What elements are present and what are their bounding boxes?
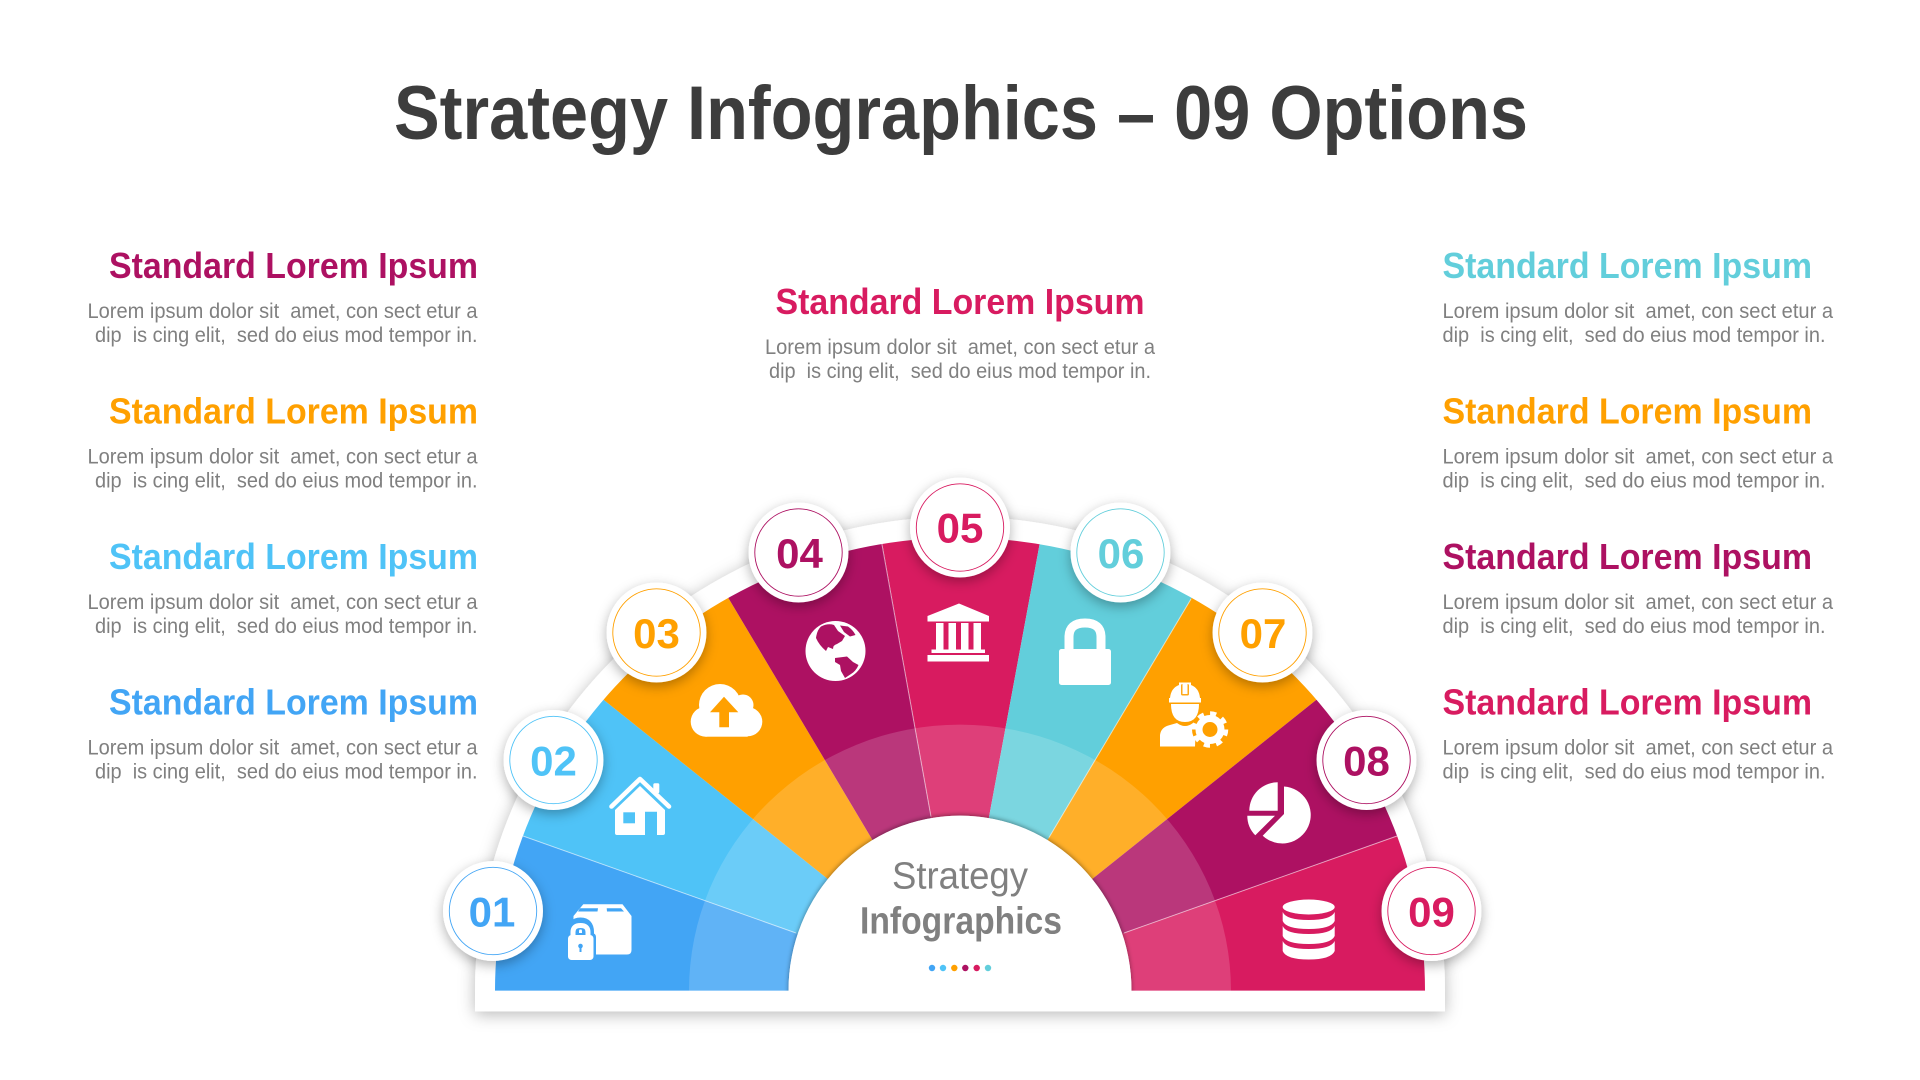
semicircle base plate bbox=[475, 517, 1445, 1012]
centre hub bbox=[788, 816, 1132, 1000]
option 04 text: dip is cing elit, sed do eius mod tempor in. bbox=[95, 324, 478, 347]
icon: database bbox=[1283, 900, 1335, 960]
badge 04 bbox=[748, 502, 848, 602]
option 06 text: Lorem ipsum dolor sit amet, con sect etur a bbox=[1442, 300, 1833, 323]
segment 07 bbox=[1048, 598, 1316, 879]
option 01 text bbox=[88, 682, 478, 784]
option 08 text bbox=[1442, 536, 1833, 638]
option 04 text: Lorem ipsum dolor sit amet, con sect etur a bbox=[88, 300, 478, 323]
badge 05: 05 bbox=[937, 505, 983, 552]
badge 09 bbox=[1382, 861, 1482, 961]
option 01 text: dip is cing elit, sed do eius mod tempor in. bbox=[95, 760, 478, 784]
badge 01: 01 bbox=[469, 888, 515, 936]
option 08 text: dip is cing elit, sed do eius mod tempor in. bbox=[1442, 615, 1826, 638]
hub colour dots bbox=[929, 965, 991, 971]
badge 02 bbox=[504, 710, 604, 810]
option 06 text: Standard Lorem Ipsum bbox=[1442, 245, 1812, 286]
icon: cloud upload bbox=[691, 684, 762, 737]
option 06 text: dip is cing elit, sed do eius mod tempor in. bbox=[1442, 324, 1826, 347]
segment 06 bbox=[988, 544, 1192, 840]
option 03 text: Standard Lorem Ipsum bbox=[109, 390, 478, 432]
option 04 text bbox=[88, 245, 478, 347]
option 07 text: dip is cing elit, sed do eius mod tempor in. bbox=[1442, 470, 1826, 492]
segment 02 bbox=[523, 700, 828, 934]
option 02 text: Lorem ipsum dolor sit amet, con sect etur a bbox=[88, 591, 478, 614]
option 05 text: Standard Lorem Ipsum bbox=[776, 281, 1144, 322]
left text column bbox=[88, 245, 478, 784]
icon: box with padlock bbox=[565, 904, 632, 962]
option 09 text: Standard Lorem Ipsum bbox=[1442, 682, 1812, 722]
hub label: Strategy bbox=[892, 856, 1028, 898]
option 07 text: Standard Lorem Ipsum bbox=[1442, 390, 1812, 432]
option 04 text: Standard Lorem Ipsum bbox=[109, 245, 478, 286]
option 09 text bbox=[1442, 682, 1833, 784]
badge 01 bbox=[443, 861, 543, 961]
fan of nine segments bbox=[495, 540, 1425, 991]
icon: padlock bbox=[1059, 623, 1111, 685]
right text column bbox=[1442, 245, 1833, 784]
badge 07: 07 bbox=[1240, 610, 1286, 657]
option 03 text: Lorem ipsum dolor sit amet, con sect etur a bbox=[88, 446, 478, 468]
badge 07 bbox=[1212, 582, 1312, 682]
icon: globe bbox=[806, 621, 866, 681]
option 07 text: Lorem ipsum dolor sit amet, con sect etur a bbox=[1442, 446, 1833, 468]
option 03 text bbox=[88, 390, 478, 492]
segment 09 bbox=[1122, 836, 1425, 991]
option 02 text: Standard Lorem Ipsum bbox=[109, 536, 478, 577]
badge 04: 04 bbox=[776, 530, 823, 577]
option 09 text: dip is cing elit, sed do eius mod tempor in. bbox=[1442, 760, 1826, 784]
badge 05 bbox=[910, 478, 1010, 578]
option 05 text: Lorem ipsum dolor sit amet, con sect etur a bbox=[765, 336, 1155, 359]
option 06 text bbox=[1442, 245, 1833, 347]
icon: bank building bbox=[928, 604, 989, 662]
option 08 text: Standard Lorem Ipsum bbox=[1442, 536, 1812, 577]
badge 09: 09 bbox=[1408, 888, 1455, 936]
badge 03: 03 bbox=[633, 610, 680, 657]
badge 08: 08 bbox=[1343, 738, 1390, 784]
option 05 text bbox=[765, 281, 1155, 383]
option 07 text bbox=[1442, 390, 1833, 492]
option 02 text: dip is cing elit, sed do eius mod tempor in. bbox=[95, 615, 478, 638]
segment 05 bbox=[882, 540, 1040, 818]
badge 02: 02 bbox=[530, 738, 577, 784]
badge 06 bbox=[1070, 502, 1170, 602]
icon: house bbox=[612, 779, 669, 835]
segment divider lines bbox=[523, 543, 1397, 933]
infographic canvas bbox=[89, 84, 1834, 1024]
option 09 text: Lorem ipsum dolor sit amet, con sect etur a bbox=[1442, 736, 1833, 760]
icon: pie chart bbox=[1247, 782, 1311, 843]
option 08 text: Lorem ipsum dolor sit amet, con sect etur a bbox=[1442, 591, 1833, 614]
badge 03 bbox=[606, 582, 706, 682]
option 01 text: Standard Lorem Ipsum bbox=[109, 682, 478, 722]
option 05 text: dip is cing elit, sed do eius mod tempor in. bbox=[769, 360, 1151, 383]
segment 04 bbox=[728, 544, 932, 840]
icon: engineer with gear bbox=[1160, 682, 1228, 748]
badge 06: 06 bbox=[1098, 530, 1144, 577]
hub label bbox=[860, 856, 1062, 942]
hub label: Infographics bbox=[860, 900, 1062, 942]
option 02 text bbox=[88, 536, 478, 638]
translucent inner band bbox=[689, 725, 1231, 991]
segment 03 bbox=[604, 598, 872, 879]
badge 08 bbox=[1316, 710, 1416, 810]
title: Strategy Infographics – 09 Options bbox=[394, 71, 1528, 156]
segment 08 bbox=[1092, 700, 1397, 934]
segment 01 bbox=[495, 836, 798, 991]
option 03 text: dip is cing elit, sed do eius mod tempor in. bbox=[95, 470, 478, 492]
option 01 text: Lorem ipsum dolor sit amet, con sect etur a bbox=[88, 736, 478, 760]
